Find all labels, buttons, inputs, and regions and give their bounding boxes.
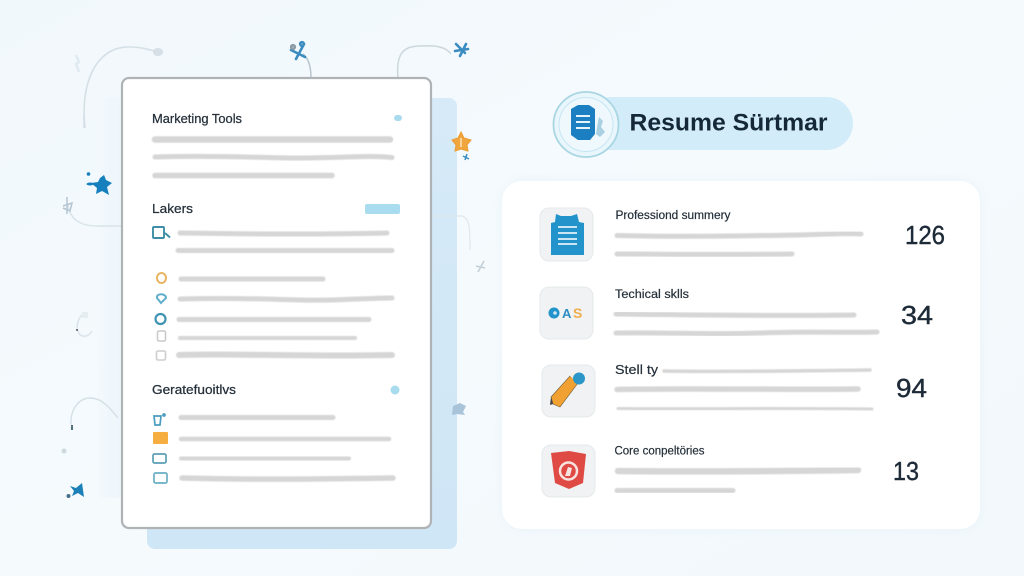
icon: letter tile: S bbox=[573, 305, 582, 321]
connector: left lower curve bbox=[68, 205, 122, 226]
icon: grey clip bbox=[76, 312, 92, 336]
row: technical skills bbox=[540, 287, 933, 339]
connector: lower left curve bbox=[71, 398, 118, 425]
panel: resume document bbox=[122, 78, 431, 528]
icon: teal outline box two bbox=[154, 473, 167, 483]
icon: blue splat right of resume bbox=[452, 403, 466, 415]
decorative background sheet left bbox=[98, 98, 158, 498]
accent dot bbox=[394, 115, 402, 121]
icon: teal pencil box bbox=[154, 414, 165, 425]
lines bbox=[617, 470, 858, 490]
icon: letter tile: A bbox=[562, 306, 572, 321]
icon: document badge bbox=[554, 92, 618, 157]
icon: orange ring bbox=[157, 273, 166, 283]
lines bbox=[617, 370, 872, 409]
icon: blue clipboard bbox=[540, 208, 593, 261]
icon: blue pin ring bbox=[157, 294, 166, 303]
value: 34 bbox=[901, 302, 933, 330]
text lines: lakers bbox=[178, 233, 392, 356]
connector: top centre curve to scissors bbox=[303, 54, 311, 78]
icon: orange square bbox=[153, 432, 168, 444]
icon: faint knot bbox=[63, 197, 72, 214]
icon: red shield bbox=[542, 445, 595, 497]
text lines: third section bbox=[181, 418, 393, 479]
icon: teal outline box one bbox=[153, 454, 166, 463]
icon: blue asterisk top right bbox=[455, 44, 468, 56]
accent dot two bbox=[390, 386, 400, 394]
text lines: marketing tools bbox=[155, 140, 392, 176]
value: 13 bbox=[893, 458, 919, 486]
icon: blue splat lower left bbox=[66, 483, 84, 498]
label: Stell ty bbox=[615, 362, 659, 377]
row: core competencies bbox=[542, 445, 919, 497]
icon: orange star bbox=[452, 132, 471, 160]
label: Techical sklls bbox=[615, 289, 689, 301]
connector: top right curve bbox=[398, 46, 451, 78]
heading: third section: Geratefuoitlvs bbox=[152, 383, 236, 397]
icon: letter tile bbox=[540, 287, 593, 339]
accent bar bbox=[365, 204, 400, 214]
heading: marketing tools: Marketing Tools bbox=[152, 112, 242, 126]
back sheet behind resume bbox=[147, 98, 457, 549]
icon: blue scissors bbox=[291, 42, 305, 59]
icon: small dark pin bbox=[71, 425, 73, 430]
panel: summary card bbox=[502, 181, 980, 529]
connector: right side faint lines bbox=[432, 216, 470, 250]
value: 126 bbox=[905, 222, 945, 250]
value: 94 bbox=[896, 375, 927, 403]
icon: faint right marks bbox=[476, 261, 485, 272]
icon: grey checkbox one bbox=[158, 331, 166, 341]
label: Core conpeltöries bbox=[614, 446, 705, 458]
connector: top left curve with node bbox=[84, 47, 163, 128]
icon: grey checkbox two bbox=[156, 351, 166, 360]
label: Professiond summery bbox=[616, 210, 731, 222]
icon: grey dot bbox=[62, 448, 66, 454]
icon: faint squiggle bbox=[76, 55, 79, 72]
title text: Resume Sürtmar bbox=[630, 110, 828, 136]
icon: teal box with tick bbox=[153, 227, 170, 238]
lines bbox=[616, 314, 877, 334]
icon: blue splat bbox=[86, 172, 112, 195]
heading: lakers: Lakers bbox=[152, 201, 194, 216]
icon: pencil bbox=[542, 365, 595, 417]
row: style bbox=[542, 362, 927, 417]
lines bbox=[617, 234, 861, 254]
title pill bbox=[554, 92, 853, 157]
row: professional summary bbox=[540, 208, 945, 261]
icon: teal ring bbox=[156, 314, 166, 324]
